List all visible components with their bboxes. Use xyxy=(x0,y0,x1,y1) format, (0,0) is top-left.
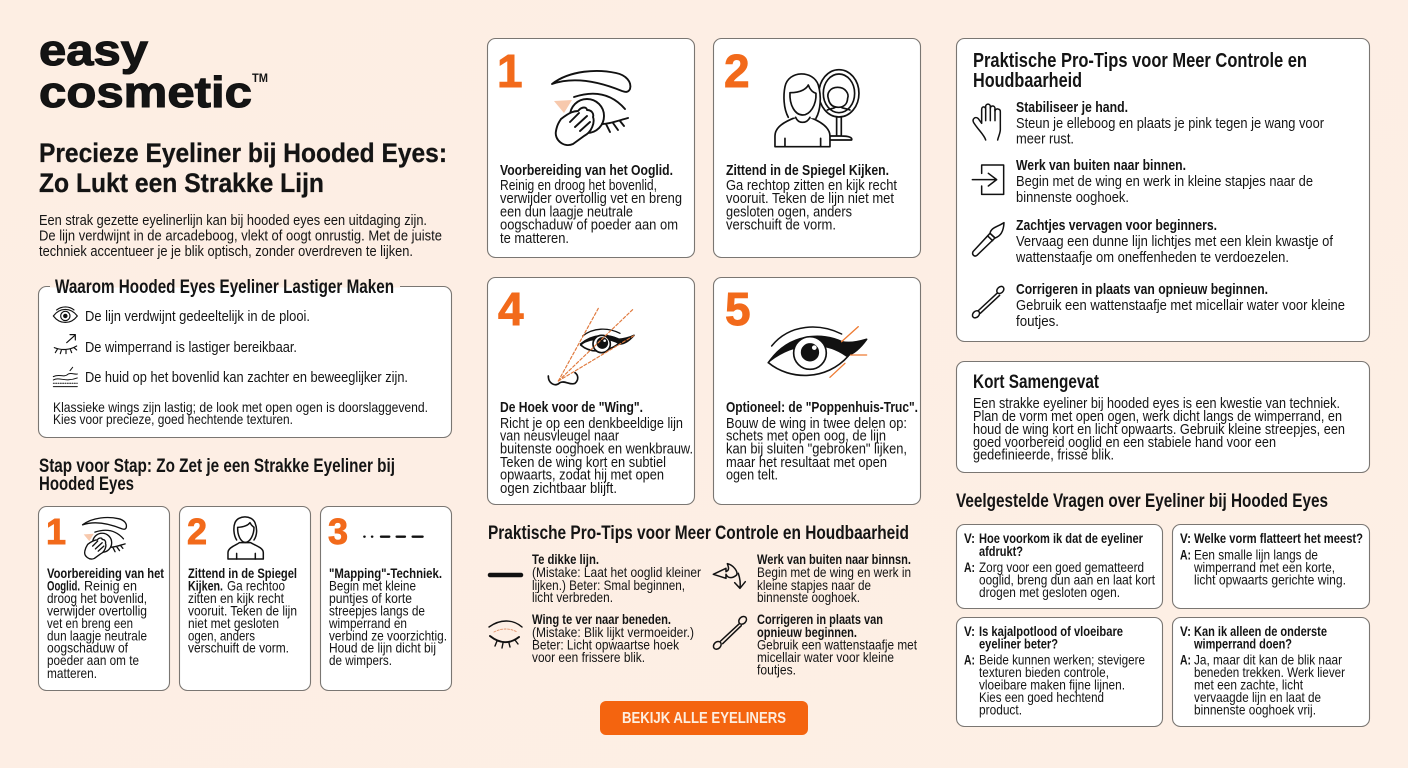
title: Precieze Eyeliner bij Hooded Eyes: xyxy=(39,138,447,168)
icon: cotton swab xyxy=(971,285,1005,319)
text: tip thick line: (Mistake: Laat het ooglid kleiner xyxy=(532,564,701,580)
heading: pro-tips xyxy=(973,50,1307,92)
text: tip outside in: binnenste ooghoek. xyxy=(1016,189,1129,206)
panel: large step 4 xyxy=(488,278,694,504)
title xyxy=(39,138,447,198)
panel: faq 3: V: xyxy=(964,623,975,639)
text: summary xyxy=(973,395,1345,464)
icon: eye preparation xyxy=(83,518,126,559)
text: tip correct: foutjes. xyxy=(1016,313,1059,330)
panel: faq 3: product. xyxy=(979,702,1022,718)
text: large step 4: Richt je op een denkbeeldige lijn xyxy=(500,415,683,432)
panel: faq 4: wimperrand doen? xyxy=(1193,636,1292,652)
text: tip correct: Corrigeren in plaats van xyxy=(757,611,883,627)
text: summary: gedefinieerde, frisse blik. xyxy=(973,446,1114,464)
text: small step 3: "Mapping"-Techniek. xyxy=(329,565,442,581)
text: tip outside in: binnenste ooghoek. xyxy=(757,589,860,605)
text: large step 2: vooruit. Teken de lijn niet met xyxy=(726,190,895,207)
number 1: 1 xyxy=(497,45,523,97)
text: small step 2: Kijken. xyxy=(188,578,223,594)
text: small step 2: Zittend in de Spiegel xyxy=(188,565,297,581)
heading: stap voor stap: Hooded Eyes xyxy=(39,474,134,495)
panel: large step 1 xyxy=(488,38,694,258)
panel: faq 3: Is kajalpotlood of vloeibare xyxy=(979,623,1123,639)
text: tip outside in: Begin met de wing en werk in kleine stapjes naar de xyxy=(1016,173,1313,190)
text: tip outside in: Begin met de wing en werk in xyxy=(757,564,911,580)
panel: large step 5 xyxy=(714,278,920,504)
text: small step 2: niet met gesloten xyxy=(188,615,279,631)
panel: faq 4: Ja, maar dit kan de blik naar xyxy=(1194,652,1342,668)
text: tip hand: meer rust. xyxy=(1016,130,1074,148)
panel: faq 2: Een smalle lijn langs de xyxy=(1194,546,1318,562)
panel: faq 3: A: xyxy=(964,652,975,668)
button: bekijk alle eyeliners: BEKIJK ALLE EYELINERS xyxy=(622,710,786,727)
icon: wing angle xyxy=(548,308,635,385)
heading: pro-tips: Praktische Pro-Tips voor Meer Controle en xyxy=(973,50,1307,72)
panel: large step 2 xyxy=(714,38,920,258)
number 4: 4 xyxy=(498,283,524,335)
text: tip thick line: Te dikke lijn. xyxy=(532,551,599,567)
panel: faq 3: vloeibare maken fijne lijnen. xyxy=(979,676,1125,692)
intro text xyxy=(39,212,442,260)
text: tip hand: Stabiliseer je hand. xyxy=(1016,99,1128,116)
panel: centre tips xyxy=(489,551,917,678)
text: small step 3: Begin met kleine xyxy=(329,578,416,594)
panel: waarom hooded eyes lastiger xyxy=(38,277,452,438)
heading: stap voor stap: Stap voor Stap: Zo Zet je een Strakke Eyeliner bij xyxy=(39,456,395,477)
text: tip soften xyxy=(1015,217,1334,266)
icon: woman xyxy=(228,517,263,559)
text: large step 4: Teken de wing kort en subtiel xyxy=(500,454,666,471)
text: tip outside in: Werk van buiten naar binnsn. xyxy=(757,551,911,567)
panel: faq 2: licht opwaarts gerichte wing. xyxy=(1194,572,1346,588)
text: tip correct: Corrigeren in plaats van opnieuw beginnen. xyxy=(1016,281,1268,298)
icon: eye preparation xyxy=(552,71,630,145)
heading: stap voor stap xyxy=(39,456,395,495)
text: small step 1: Voorbereiding van het xyxy=(47,565,164,581)
logo: easy cosmetic: easy xyxy=(39,26,149,75)
panel: faq 1: afdrukt? xyxy=(979,543,1023,559)
text: large step 1: Voorbereiding van het Ooglid. xyxy=(500,162,673,179)
panel: faq 1: ooglid, breng dun aan en laat kort xyxy=(979,572,1155,588)
text: large step 5: kan bij sluiten "gebroken" lijken, xyxy=(726,440,907,458)
text: small step 2: ogen, anders xyxy=(188,628,255,644)
text: small step 3 xyxy=(328,565,447,668)
text: large step 1: te matteren. xyxy=(500,230,569,247)
logo: easy cosmetic: TM xyxy=(252,71,268,85)
text: large step 1: Reinig en droog het bovenlid, xyxy=(500,177,657,194)
text: summary: houd de wing kort en licht opwaarts. Gebruik kleine streepjes, een xyxy=(973,421,1345,438)
text: tip correct xyxy=(1016,281,1345,330)
text: tip soften: Vervaag een dunne lijn lichtjes met een klein kwastje of xyxy=(1016,233,1334,250)
panel: faq 1: drogen met gesloten ogen. xyxy=(979,584,1120,600)
text: large step 1: oogschaduw of poeder aan om xyxy=(500,216,678,234)
text: small step 3: puntjes of korte xyxy=(329,590,412,606)
panel: faq 2: Welke vorm flatteert het meest? xyxy=(1194,530,1363,546)
text: small step 3: Houd de lijn dicht bij xyxy=(329,640,436,656)
text: small step 1: vet en breng een xyxy=(47,615,133,631)
text: tip outside in xyxy=(757,551,911,605)
panel: faq 1: A: xyxy=(964,559,975,575)
logo: easy cosmetic: cosmetic xyxy=(39,68,252,117)
text: large step 5: schets met open oog, de lijn xyxy=(726,428,886,444)
text: large step 5: Bouw de wing in twee delen op: xyxy=(726,415,907,432)
text: tip soften: Zachtjes vervagen voor beginners. xyxy=(1016,217,1217,234)
text: tip wing down: voor een frissere blik. xyxy=(532,649,645,665)
icon: lashes with arrow xyxy=(54,335,77,354)
panel: faq 4: vervaagde lijn en laat de xyxy=(1194,689,1321,705)
text: tip soften: wattenstaafje om oneffenheden te verdoezelen. xyxy=(1015,249,1289,266)
icon: cotton swab xyxy=(712,615,748,651)
panel: faq 3: texturen bieden controle, xyxy=(979,664,1109,680)
text: small step 1: Ooglid. xyxy=(47,578,80,594)
heading: faq: Veelgestelde Vragen over Eyeliner bij Hooded Eyes xyxy=(956,491,1328,512)
panel: small step 1 xyxy=(38,506,170,690)
text: reason 1: De lijn verdwijnt gedeeltelijk in de plooi. xyxy=(85,308,310,325)
text: tip correct: foutjes. xyxy=(757,662,796,678)
text: large step 2: Zittend in de Spiegel Kijken. xyxy=(726,162,889,179)
text: small step 3: de wimpers. xyxy=(329,652,392,668)
text: tip outside in xyxy=(1016,157,1313,206)
panel: faq 3 xyxy=(956,618,1162,726)
number 3: 3 xyxy=(328,511,348,552)
text: large step 1: een dun laagje neutrale xyxy=(500,204,633,220)
icon: thick line xyxy=(490,573,521,577)
text: tip correct: Gebruik een wattenstaafje met xyxy=(757,636,917,652)
number 2: 2 xyxy=(187,511,207,552)
heading: pro-tips: Houdbaarheid xyxy=(973,70,1082,92)
text: note: Klassieke wings zijn lastig; de look met open ogen is doorslaggevend. xyxy=(53,399,428,415)
heading: kort samengevat: Kort Samengevat xyxy=(973,372,1100,393)
text: small step 2: zitten en kijk recht xyxy=(188,590,284,606)
icon: dotted line xyxy=(364,533,423,540)
text: reason 2: De wimperrand is lastiger bereikbaar. xyxy=(85,339,297,356)
text: tip correct: Gebruik een wattenstaafje met micellair water voor kleine xyxy=(1016,297,1345,314)
panel: faq 1: Zorg voor een goed gematteerd xyxy=(979,559,1144,575)
panel: faq 4: beneden trekken. Werk liever xyxy=(1194,664,1345,680)
panel: faq 3: eyeliner beter? xyxy=(979,636,1058,652)
panel: faq 4 xyxy=(1172,618,1370,726)
panel: faq 2: A: xyxy=(1180,546,1191,562)
text: tip wing down: Beter: Licht opwaartse hoek xyxy=(532,636,680,652)
text: large step 4 xyxy=(500,399,693,497)
logo: easy cosmetic xyxy=(39,26,268,117)
panel: faq 3: Beide kunnen werken; stevigere xyxy=(979,652,1145,668)
icon: inward arrow xyxy=(713,564,745,588)
panel: faq 1 xyxy=(956,524,1162,608)
panel: faq 2: V: xyxy=(1180,530,1191,546)
text: large step 1 xyxy=(500,162,682,247)
text: large step 2 xyxy=(726,162,898,234)
title: Zo Lukt een Strakke Lijn xyxy=(39,168,324,198)
text: small step 3: verbind ze voorzichtig. xyxy=(329,628,447,644)
panel: faq 3: Kies een goed hechtend xyxy=(979,689,1104,705)
text: small step 3: streepjes langs de xyxy=(329,602,425,618)
icon: skin layers xyxy=(53,367,77,387)
text: large step 5: ogen telt. xyxy=(726,466,778,484)
number 5: 5 xyxy=(725,283,751,335)
text: small step 1: oogschaduw of xyxy=(47,640,128,656)
number 2: 2 xyxy=(724,45,750,97)
text: large step 4: van neusvleugel naar xyxy=(500,428,619,444)
panel: faq 2 xyxy=(1172,524,1370,608)
intro text: Een strak gezette eyelinerlijn kan bij hooded eyes een uitdaging zijn. xyxy=(39,212,427,229)
panel: faq 4: A: xyxy=(1180,652,1191,668)
text: note: Kies voor precieze, goed hechtende texturen. xyxy=(53,411,293,427)
panel: faq 1: Hoe voorkom ik dat de eyeliner xyxy=(979,530,1143,546)
text: small step 1 xyxy=(47,565,164,681)
button: bekijk alle eyeliners xyxy=(600,701,808,735)
panel: kort samengevat xyxy=(956,362,1370,472)
icon: bold winged eye xyxy=(768,327,867,377)
panel: small step 3 xyxy=(320,506,452,690)
text: tip correct xyxy=(757,611,917,678)
text: small step 2: verschuift de vorm. xyxy=(188,640,289,656)
text: small step 2: Ga rechtoo xyxy=(227,578,285,594)
text: large step 4: buitenste ooghoek en wenkbrauw. xyxy=(500,440,693,458)
panel: faq 4: met een zachte, licht xyxy=(1194,676,1303,692)
panel: small step 2 xyxy=(180,506,310,690)
text: small step 2 xyxy=(188,565,297,656)
text: large step 2: gesloten ogen, anders xyxy=(726,204,852,220)
panel: faq 4: V: xyxy=(1180,623,1191,639)
text: small step 1: Reinig en xyxy=(84,578,137,594)
number 1: 1 xyxy=(46,511,66,552)
icon: closed eye xyxy=(489,621,522,648)
intro text: techniek accentueer je je blik optisch, zonder overdreven te lijken. xyxy=(39,243,413,260)
text: small step 1: poeder aan om te xyxy=(47,652,139,668)
text: tip correct: opnieuw beginnen. xyxy=(757,624,857,640)
heading: pro-tips centre: Praktische Pro-Tips voor Meer Controle en Houdbaarheid xyxy=(488,523,909,544)
text: tip wing down xyxy=(532,611,694,665)
panel: pro-tips right xyxy=(956,38,1370,342)
text: large step 2: verschuift de vorm. xyxy=(726,216,836,234)
text: tip hand: Steun je elleboog en plaats je pink tegen je wang voor xyxy=(1016,115,1324,132)
text: tip hand xyxy=(1016,99,1324,148)
text: small step 1: dun laagje neutrale xyxy=(47,628,147,644)
text: small step 3: wimperrand en xyxy=(328,615,407,631)
text: tip wing down: Wing te ver naar beneden. xyxy=(532,611,671,627)
text: tip correct: micellair water voor kleine xyxy=(757,649,894,665)
text: tip thick line: licht verbreden. xyxy=(532,589,613,605)
intro text: De lijn verdwijnt in de arcadeboog, vlekt of oogt onrustig. Met de juiste xyxy=(39,228,442,244)
text: large step 5: maar het resultaat met open xyxy=(726,454,887,471)
panel: faq 1: V: xyxy=(964,530,975,546)
icon: eye xyxy=(53,307,77,322)
panel: faq 2: wimperrand met een korte, xyxy=(1193,559,1335,575)
text: large step 5: Optioneel: de "Poppenhuis-Truc". xyxy=(726,399,918,416)
text: summary: Plan de vorm met open ogen, werk dicht langs de wimperrand, en xyxy=(973,408,1342,425)
text: large step 4: opwaarts, zodat hij met open xyxy=(500,466,664,484)
text: tip thick line: lijken.) Beter: Smal beginnen, xyxy=(532,577,685,593)
icon: brush xyxy=(973,223,1004,256)
text: reason 3: De huid op het bovenlid kan zachter en beweeglijker zijn. xyxy=(85,369,408,386)
heading: waarom: Waarom Hooded Eyes Eyeliner Lastiger Maken xyxy=(55,277,394,298)
text: tip wing down: (Mistake: Blik lijkt vermoeider.) xyxy=(532,624,694,640)
icon: arrow into box xyxy=(972,165,1004,194)
text: summary: goed voorbereid ooglid en een stabiele hand voor een xyxy=(973,434,1276,451)
text: small step 1: droog het bovenlid, xyxy=(47,590,147,606)
panel: faq 4: binnenste ooghoek vrij. xyxy=(1194,702,1316,718)
icon: hand xyxy=(973,104,1000,140)
text: note xyxy=(53,399,428,427)
text: small step 1: verwijder overtollig xyxy=(47,602,147,618)
text: large step 5 xyxy=(726,399,918,484)
text: tip outside in: kleine stapjes naar de xyxy=(757,577,871,593)
panel: faq 4: Kan ik alleen de onderste xyxy=(1194,623,1327,639)
text: small step 1: matteren. xyxy=(47,665,97,681)
text: summary: Een strakke eyeliner bij hooded eyes is een kwestie van techniek. xyxy=(973,395,1340,412)
text: small step 2: vooruit. Teken de lijn xyxy=(188,602,297,618)
icon: woman with mirror xyxy=(775,70,859,147)
text: large step 4: De Hoek voor de "Wing". xyxy=(500,399,643,416)
text: tip thick line xyxy=(532,551,701,605)
text: large step 1: verwijder overtollig vet en breng xyxy=(500,190,682,207)
text: large step 2: Ga rechtop zitten en kijk recht xyxy=(726,177,898,194)
text: tip outside in: Werk van buiten naar binnen. xyxy=(1016,157,1186,174)
text: large step 4: ogen zichtbaar blijft. xyxy=(500,480,617,497)
